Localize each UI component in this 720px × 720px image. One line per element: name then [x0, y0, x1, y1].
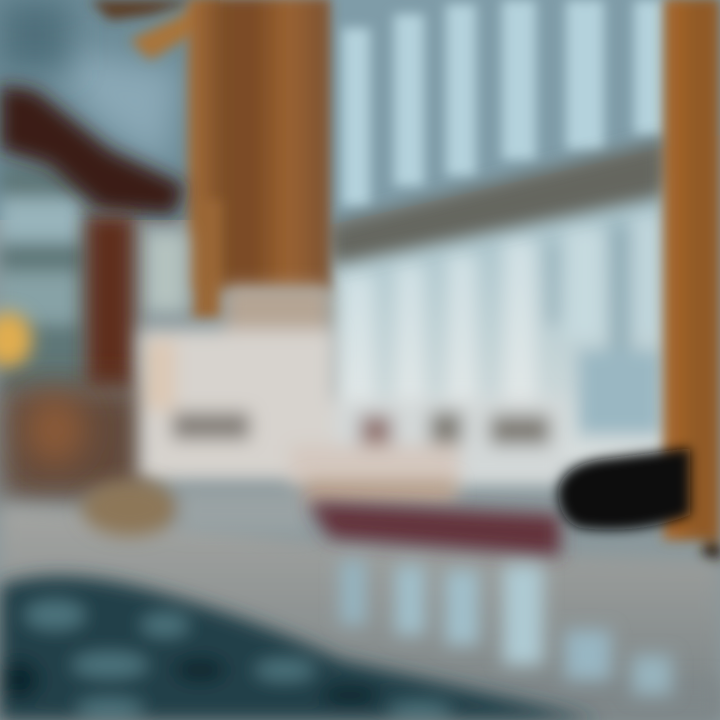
red rug	[308, 502, 560, 556]
upper windows	[330, 0, 720, 225]
upper left ceiling	[0, 0, 220, 220]
black armchair	[558, 448, 690, 530]
floor window reflections	[340, 560, 672, 695]
lower windows	[330, 180, 670, 470]
left dark wood arch	[0, 85, 185, 215]
floor	[0, 505, 720, 720]
left dark column	[86, 215, 134, 390]
white sofas	[140, 285, 565, 490]
window crossbeam	[330, 140, 665, 265]
wood columns	[188, 0, 330, 318]
dark patterned carpet	[0, 576, 600, 720]
lamp glow	[0, 312, 32, 368]
table and seats base	[82, 480, 455, 536]
right wood column	[664, 0, 720, 562]
top left wood beam	[90, 0, 225, 60]
left lower brown furnishing	[0, 385, 145, 500]
left background windows	[0, 165, 187, 395]
